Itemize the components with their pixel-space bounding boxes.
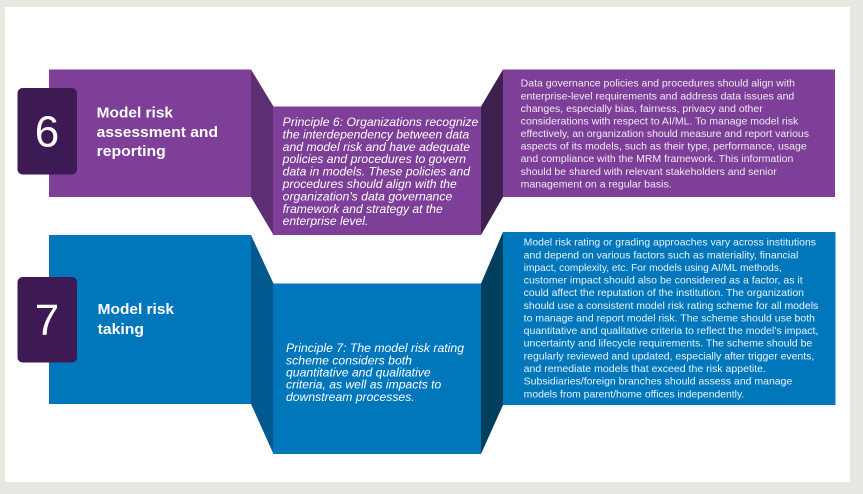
panel: row 7 title band <box>49 235 251 404</box>
panel: row 7 detail text <box>503 232 836 405</box>
panel: row 6 detail text: and compliance with the MRM framework. This information <box>521 154 794 165</box>
panel: row 7 right fold <box>481 232 503 454</box>
panel: row 7 detail text: to manage and report model risk. The scheme should use both <box>524 314 815 324</box>
panel: row 6 principle <box>273 106 481 235</box>
panel: row 7 detail text: regularly reviewed and updated, especially after trigger events, <box>524 351 814 362</box>
panel: row 7 principle: scheme considers both <box>286 354 412 367</box>
panel: row 6 detail text: Data governance policies and procedures should align with <box>521 79 795 90</box>
panel: row 7 detail text: quantitative and qualitative criteria to reflect the model's impact, <box>524 326 818 337</box>
number badge 6: 6 <box>35 108 59 156</box>
panel: row 6 principle: data in models. These policies and <box>283 166 471 179</box>
panel: row 7 principle: criteria, as well as impacts to <box>286 379 442 392</box>
heading: row 6: reporting <box>97 143 166 160</box>
heading: row 7: taking <box>98 321 144 338</box>
panel: row 7 detail text: should use a consistent model risk rating scheme for all models <box>524 301 818 312</box>
panel: row 6 principle: and model risk and have adequate <box>283 141 471 154</box>
panel: row 6 detail text: considerations with respect to AI/ML. To manage model risk <box>521 116 799 127</box>
panel: row 7 detail text: and remediate models that exceed the risk appetite. <box>524 364 766 375</box>
heading: row 6 <box>97 105 218 160</box>
number badge 6 <box>18 88 77 174</box>
panel: row 6 principle: framework and strategy at the <box>283 203 443 216</box>
panel: row 6 detail text: effectively, an organization should measure and report various <box>521 129 809 140</box>
panel: row 6 detail text: enterprise-level requirements and address data issues and <box>521 91 795 102</box>
heading: row 7: Model risk <box>98 301 175 318</box>
panel: row 7 principle: downstream processes. <box>286 391 415 404</box>
panel: row 6 principle: policies and procedures to govern <box>282 153 466 166</box>
panel: row 6 principle: procedures should align with the <box>282 178 457 191</box>
panel: row 7 detail text: impact, complexity, etc. For models using AI/ML methods, <box>524 263 782 274</box>
panel: row 6 principle: Principle 6: Organizations recognize <box>283 116 479 129</box>
panel: row 7 detail text: models from parent/home offices independently. <box>524 389 744 400</box>
panel: row 6 principle: organization's data governance <box>283 190 453 203</box>
panel: row 7 left fold <box>251 235 274 454</box>
panel: row 6 title band <box>49 70 251 197</box>
panel: row 6 detail text: aspects of its models, such as their type, performance, usage <box>521 142 807 153</box>
panel: row 6 principle: enterprise level. <box>283 215 368 228</box>
panel: row 6 right fold <box>481 70 503 235</box>
panel: row 6 detail text: management on a regular basis. <box>521 179 672 190</box>
panel: row 7 principle: Principle 7: The model risk rating <box>286 342 465 355</box>
panel: row 7 principle <box>273 284 481 454</box>
row 6: model risk assessment and reporting <box>18 70 835 235</box>
panel: row 7 detail text: customer impact should also be considered as a factor, as it <box>524 276 803 287</box>
panel: row 6 principle: the interdependency between data <box>283 128 470 141</box>
panel: row 7 detail text: and depend on various factors such as materiality, financial <box>524 250 798 261</box>
row 7: model risk taking <box>18 232 836 454</box>
panel: row 7 detail text: Model risk rating or grading approaches vary across institutions <box>524 238 816 249</box>
panel: row 7 detail text: uncertainty and lifecycle requirements. The scheme should be <box>524 339 813 350</box>
panel: row 7 principle: quantitative and qualitative <box>286 367 431 380</box>
number badge 7: 7 <box>35 296 59 345</box>
panel: row 7 detail text: could affect the reputation of the institution. The organization <box>524 288 804 299</box>
heading: row 6: assessment and <box>97 124 218 141</box>
heading: row 7 <box>98 301 175 338</box>
panel: row 6 detail text: should be shared with relevant stakeholders and senior <box>521 167 777 178</box>
heading: row 6: Model risk <box>97 105 174 122</box>
panel: row 6 detail text: changes, especially bias, fairness, privacy and other <box>521 104 763 115</box>
number badge 7 <box>18 277 77 362</box>
panel: row 7 detail text: Subsidiaries/foreign branches should assess and manage <box>524 377 793 388</box>
panel: row 6 detail text <box>503 70 835 197</box>
panel: row 6 left fold <box>251 70 274 235</box>
